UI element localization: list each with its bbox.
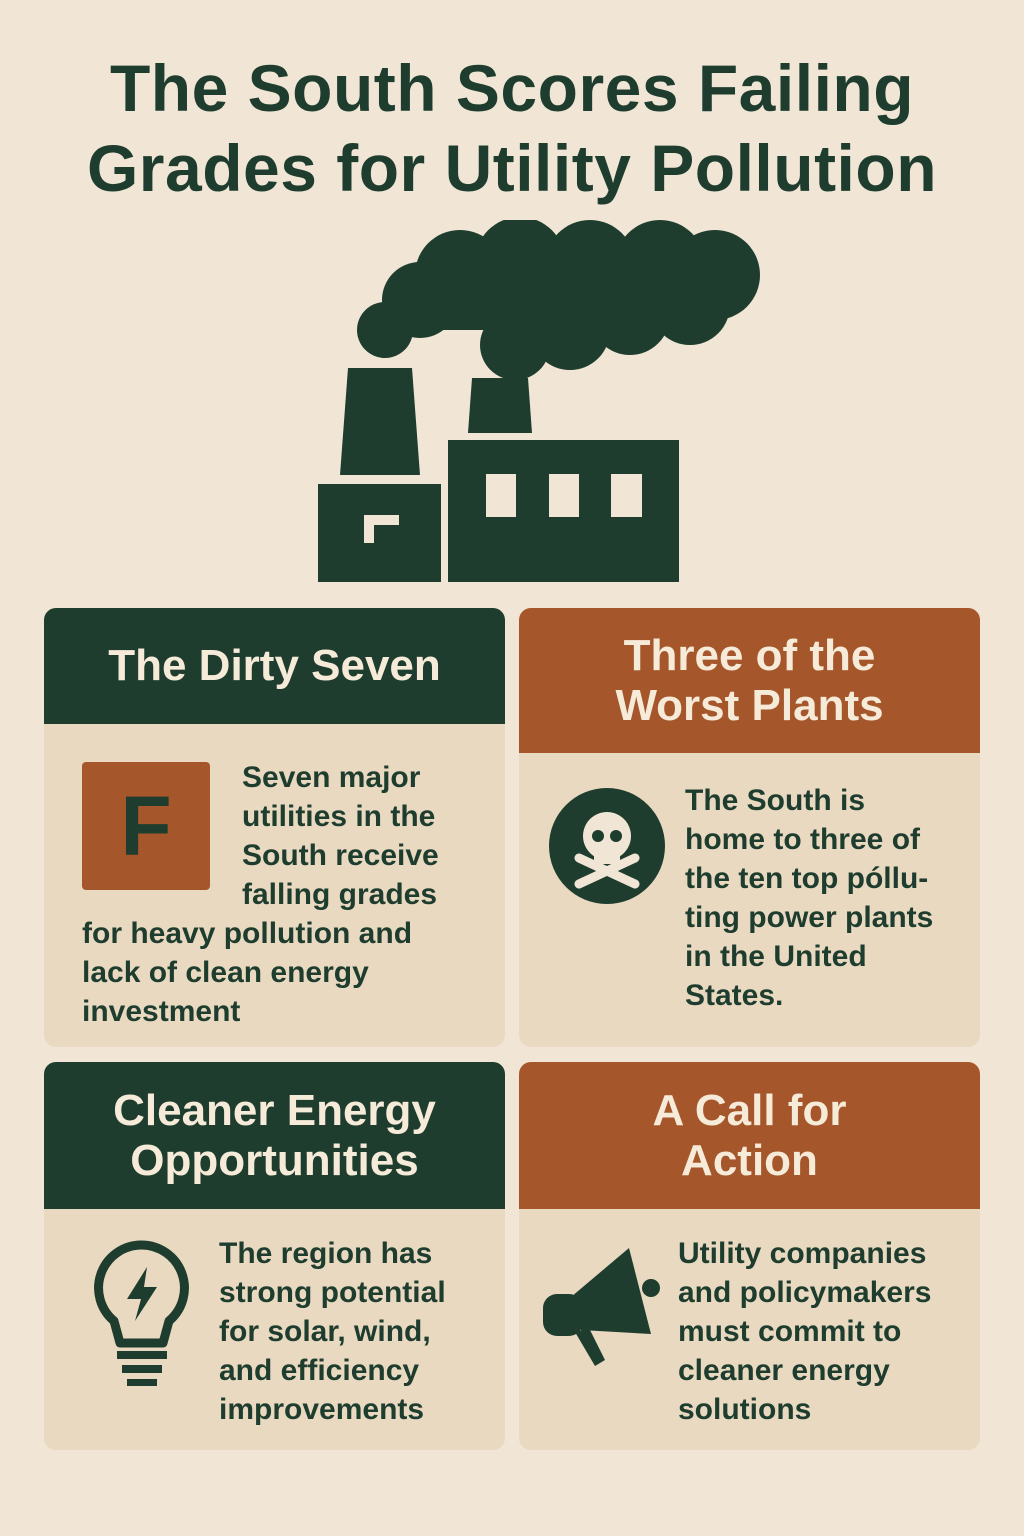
title: [87, 51, 937, 205]
text block: [685, 784, 933, 1012]
heading: [519, 1062, 980, 1209]
text block: in the United: [685, 940, 867, 973]
text block: [82, 761, 439, 1028]
icon: lightbulb: [94, 1240, 189, 1386]
text block: for solar, wind,: [219, 1315, 431, 1348]
text block: falling grades: [242, 878, 437, 911]
heading: Worst Plants: [615, 680, 884, 730]
text block: States.: [685, 979, 783, 1012]
text block: Utility companies: [678, 1237, 926, 1270]
text block: home to three of: [685, 823, 920, 856]
heading: [44, 608, 505, 724]
heading: A Call for: [653, 1086, 846, 1134]
heading: Opportunities: [130, 1136, 419, 1184]
text block: solutions: [678, 1393, 811, 1426]
text block: and efficiency: [219, 1354, 419, 1387]
icon: megaphone: [543, 1248, 660, 1366]
panel: three of the worst plants: [519, 608, 980, 1047]
text block: and policymakers: [678, 1276, 931, 1309]
text block: South receive: [242, 839, 439, 872]
heading: [519, 608, 980, 753]
heading: The Dirty Seven: [108, 641, 441, 690]
text block: strong potential: [219, 1276, 446, 1309]
text block: Seven major: [242, 761, 420, 794]
icon: F grade: F: [120, 779, 172, 873]
text block: lack of clean energy: [82, 956, 369, 989]
panel: cleaner energy opportunities: [44, 1062, 505, 1450]
text block: for heavy pollution and: [82, 917, 412, 950]
icon: factory: [318, 220, 760, 582]
icon: skull: [549, 788, 665, 904]
heading: Action: [681, 1136, 818, 1184]
text block: cleaner energy: [678, 1354, 890, 1387]
text block: The region has: [219, 1237, 432, 1270]
text block: improvements: [219, 1393, 424, 1426]
heading: [44, 1062, 505, 1209]
text block: the ten top póllu-: [685, 862, 928, 895]
heading: Cleaner Energy: [113, 1086, 436, 1134]
title: Grades for Utility Pollution: [87, 131, 937, 205]
text block: [219, 1237, 446, 1426]
panel: the dirty seven: [44, 608, 505, 1047]
icon: F grade: [82, 762, 210, 890]
text block: The South is: [685, 784, 865, 817]
panel: a call for action: [519, 1062, 980, 1450]
text block: investment: [82, 995, 240, 1028]
heading: Three of the: [624, 630, 875, 680]
text block: utilities in the: [242, 800, 435, 833]
text block: ting power plants: [685, 901, 933, 934]
text block: must commit to: [678, 1315, 901, 1348]
title: The South Scores Failing: [110, 51, 914, 125]
text block: [678, 1237, 931, 1426]
